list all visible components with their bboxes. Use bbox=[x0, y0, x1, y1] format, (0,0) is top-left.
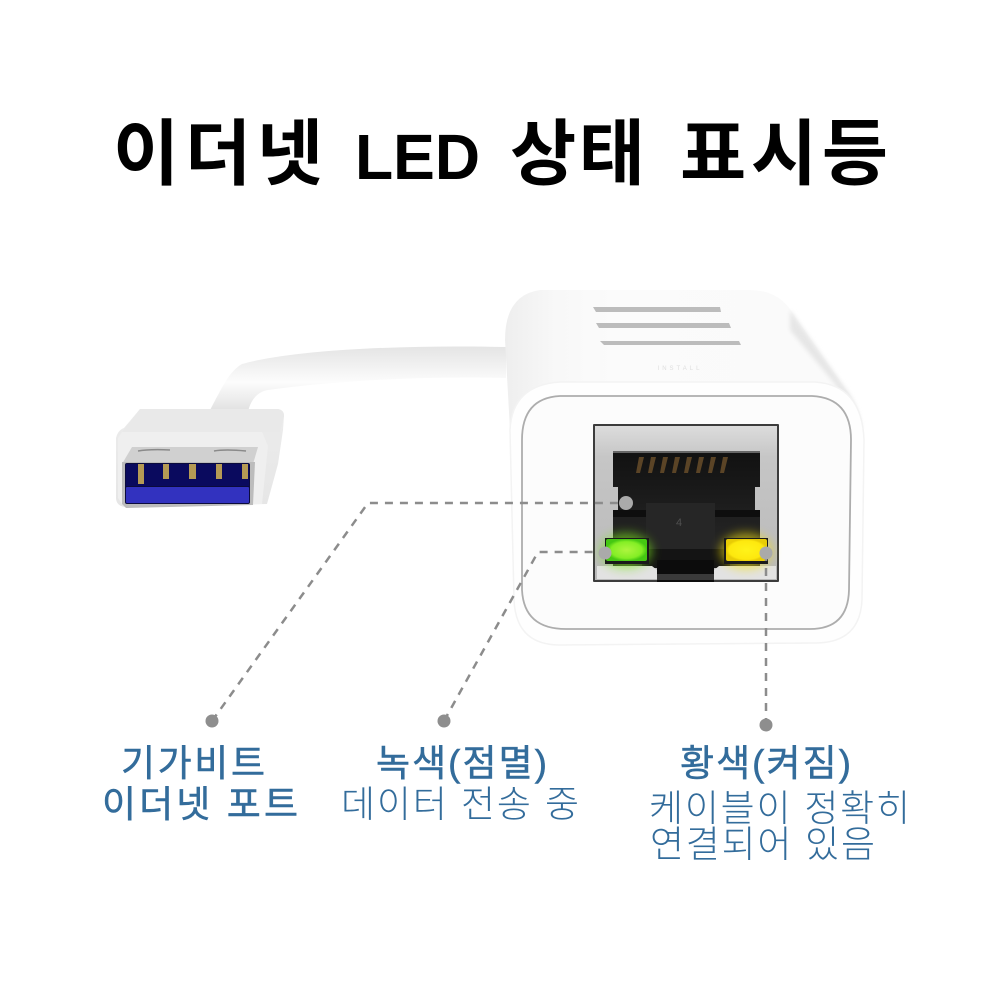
panel: adapter body bbox=[505, 290, 864, 645]
label: green blinking: 데이터 전송 중 bbox=[341, 784, 579, 825]
faint brand text: INSTALL bbox=[658, 366, 702, 372]
plug notch bbox=[657, 560, 714, 582]
contact pins bbox=[636, 457, 728, 473]
label: green blinking bbox=[341, 743, 579, 825]
icon: yellow LED bbox=[720, 533, 772, 569]
icon: USB plug bbox=[116, 409, 284, 508]
label: gigabit ethernet port: 이더넷 포트 bbox=[102, 784, 298, 825]
label: gigabit ethernet port bbox=[102, 743, 298, 825]
label: green blinking: 녹색(점멸) bbox=[376, 743, 547, 784]
icon: vent slots bbox=[593, 307, 741, 345]
icon: USB gold pins bbox=[138, 464, 248, 484]
title bbox=[113, 115, 888, 195]
callout line: green LED bbox=[438, 546, 612, 728]
front inset border bbox=[522, 396, 851, 629]
center latch bbox=[646, 503, 715, 549]
title: 이더넷 bbox=[113, 115, 323, 195]
title: LED bbox=[355, 121, 480, 193]
label: yellow on: 케이블이 정확히 bbox=[649, 788, 910, 829]
label: yellow on: 연결되어 있음 bbox=[650, 824, 875, 865]
callout line: yellow LED bbox=[760, 546, 772, 732]
title: 상태 bbox=[510, 115, 645, 195]
icon: USB cable bbox=[210, 346, 506, 412]
label: yellow on: 황색(켜짐) bbox=[680, 743, 851, 784]
icon: ethernet port: 4 bbox=[676, 517, 682, 529]
label: gigabit ethernet port: 기가비트 bbox=[121, 743, 265, 784]
port cavity bbox=[613, 451, 760, 566]
icon: green LED bbox=[600, 533, 652, 569]
callout line: gigabit ethernet port bbox=[206, 496, 633, 728]
plug metal shell bbox=[122, 447, 258, 464]
lower metal tabs bbox=[597, 566, 657, 579]
title: 표시등 bbox=[680, 115, 888, 195]
label: yellow on bbox=[649, 743, 910, 865]
front face bbox=[510, 382, 864, 645]
icon: ethernet port bbox=[593, 424, 779, 582]
